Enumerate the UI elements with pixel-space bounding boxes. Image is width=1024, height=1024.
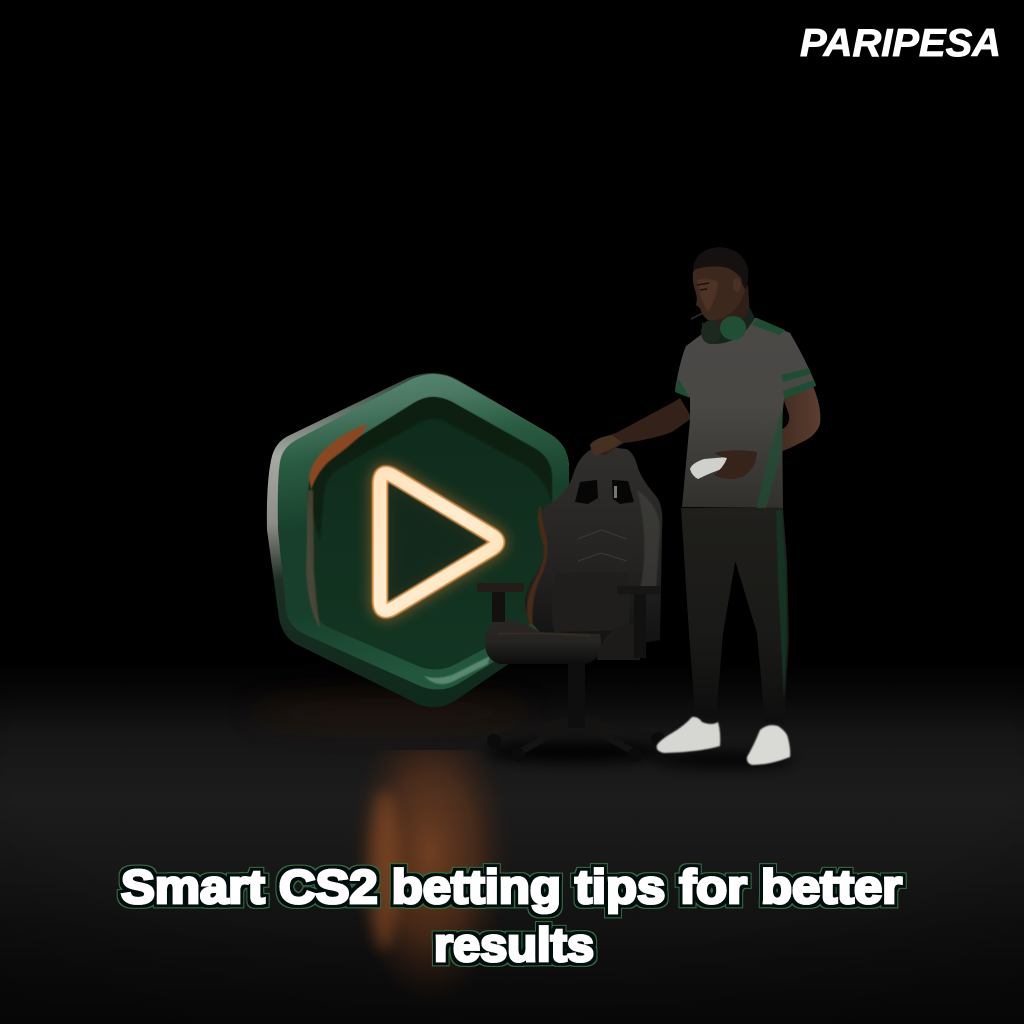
right armrest xyxy=(617,586,661,658)
shirt green accents xyxy=(675,318,816,508)
left arm xyxy=(591,398,692,455)
chair base legs xyxy=(495,718,658,752)
chair backrest xyxy=(525,448,662,650)
face xyxy=(693,258,746,320)
left leg xyxy=(681,508,737,718)
chair seat xyxy=(485,620,601,664)
headset xyxy=(691,308,755,344)
left shoe xyxy=(657,717,720,753)
gamer figure xyxy=(590,247,820,765)
t-shirt xyxy=(675,318,816,508)
right arm xyxy=(748,386,820,459)
backrest chevron seams xyxy=(578,530,627,561)
title: results xyxy=(434,918,594,971)
seat highlight xyxy=(497,633,590,636)
game controller xyxy=(690,457,729,479)
neon play triangle xyxy=(380,473,497,611)
ear xyxy=(733,278,741,292)
title xyxy=(121,860,902,971)
face highlight xyxy=(697,279,718,312)
hair xyxy=(693,247,748,290)
right wing shading xyxy=(637,490,660,590)
badge green face xyxy=(278,374,569,690)
reflective floor xyxy=(0,660,1024,1024)
neon glow halo xyxy=(380,473,497,611)
chair and shoe floor shadows xyxy=(485,742,795,767)
neon core xyxy=(380,473,497,611)
hand holding controller xyxy=(714,450,757,479)
pale inner wall xyxy=(306,490,320,628)
gaming chair xyxy=(477,448,665,762)
right seat bolster xyxy=(597,624,640,660)
left armrest xyxy=(477,583,524,622)
play triangle interior xyxy=(380,473,497,611)
harness slots xyxy=(575,480,634,504)
headset band xyxy=(702,308,755,344)
headset dark cup xyxy=(701,320,721,344)
lower rim highlight xyxy=(424,656,490,684)
hexagon badge with play icon xyxy=(267,373,569,707)
badge recessed well xyxy=(308,397,552,670)
right leg xyxy=(722,508,789,724)
badge side edge xyxy=(267,373,569,707)
chair copper edge xyxy=(527,506,548,630)
pants green stripe xyxy=(776,510,787,700)
lumbar pillow xyxy=(551,572,630,632)
chair gas column xyxy=(568,664,585,728)
title: Smart CS2 betting tips for better xyxy=(121,860,902,913)
headset mic xyxy=(691,313,703,319)
headset green cup xyxy=(720,316,746,340)
neck xyxy=(710,285,750,332)
logo: PARIPESA: PARIPESA xyxy=(800,22,1001,65)
badge inner dark shadow xyxy=(308,397,552,540)
chair casters xyxy=(487,732,665,762)
eye and brow xyxy=(697,283,709,290)
orange glow reflection on floor xyxy=(250,698,550,1024)
hand on chair xyxy=(590,435,622,456)
right shoe xyxy=(747,725,790,765)
copper inner reflection xyxy=(309,424,368,490)
